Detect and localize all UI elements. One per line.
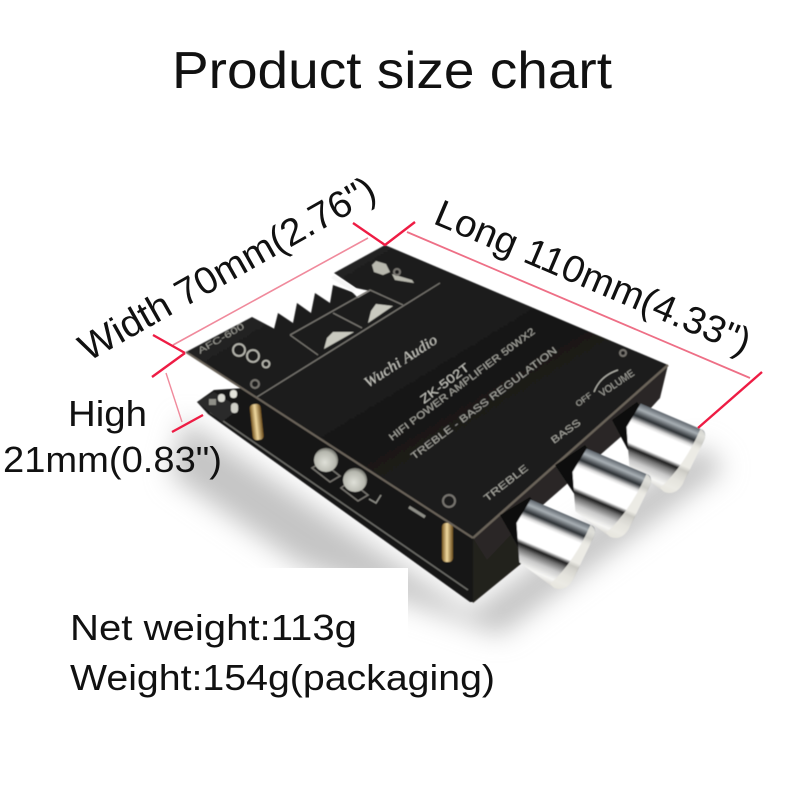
lower board edge highlight	[210, 412, 468, 590]
capacitor 1	[312, 448, 340, 482]
off label: OFF	[574, 391, 594, 409]
feature line 2: TREBLE - BASS REGULATION	[409, 345, 560, 462]
treble label: TREBLE	[482, 463, 531, 504]
speaker icon 2	[368, 304, 393, 323]
volume label: VOLUME	[598, 368, 637, 399]
model number: ZK-502T	[417, 360, 473, 406]
long label: Long 110mm(4.33")	[428, 193, 757, 364]
long dimension line	[407, 232, 750, 378]
title: Product size chart	[172, 42, 613, 100]
high label line 2: 21mm(0.83")	[3, 439, 222, 480]
front wall	[473, 496, 522, 603]
width left tick marks	[152, 335, 185, 377]
high label line 1: High	[68, 393, 147, 434]
right wall	[473, 365, 668, 560]
corner terminal block	[197, 390, 240, 422]
bluetooth logo on top block	[372, 261, 414, 283]
bass label: BASS	[549, 417, 584, 446]
volume arc	[594, 370, 618, 392]
silkscreen panel lines	[257, 283, 440, 397]
screw holes	[251, 269, 626, 507]
packaged weight: Weight:154g(packaging)	[70, 657, 495, 698]
width label: Width 70mm(2.76")	[72, 169, 383, 370]
feature line 1: HIFI POWER AMPLIFIER 50WX2	[387, 326, 538, 443]
AFC-600 label: AFC-600	[196, 321, 246, 356]
amplifier board	[186, 245, 708, 603]
small mark	[369, 495, 381, 503]
right edge of board	[473, 365, 668, 538]
heat sink	[273, 285, 360, 340]
lower circuit board and side cavity	[197, 388, 473, 602]
heat sink bright strip	[331, 275, 356, 292]
brass standoff right	[442, 523, 453, 562]
top face of board	[186, 245, 668, 538]
board drop shadow	[0, 420, 725, 800]
capacitor 2	[341, 468, 368, 501]
dimension lines	[152, 222, 762, 432]
knob: treble	[498, 498, 598, 594]
brand script: Wuchi Audio	[361, 332, 441, 391]
brass standoff left	[249, 404, 264, 441]
knob: volume	[608, 402, 708, 498]
long right tick mark	[698, 372, 762, 428]
width and long top tick marks	[353, 222, 415, 245]
high lower tick mark	[172, 415, 203, 432]
high dimension line	[166, 373, 182, 422]
net weight: Net weight:113g	[70, 607, 357, 648]
front edge of board	[186, 352, 473, 538]
knob shafts	[500, 402, 655, 550]
width dimension line	[173, 238, 368, 345]
small component	[409, 507, 425, 517]
knob: bass	[554, 447, 654, 543]
logo icon on left block	[233, 344, 270, 368]
speaker icon 1	[324, 332, 354, 349]
